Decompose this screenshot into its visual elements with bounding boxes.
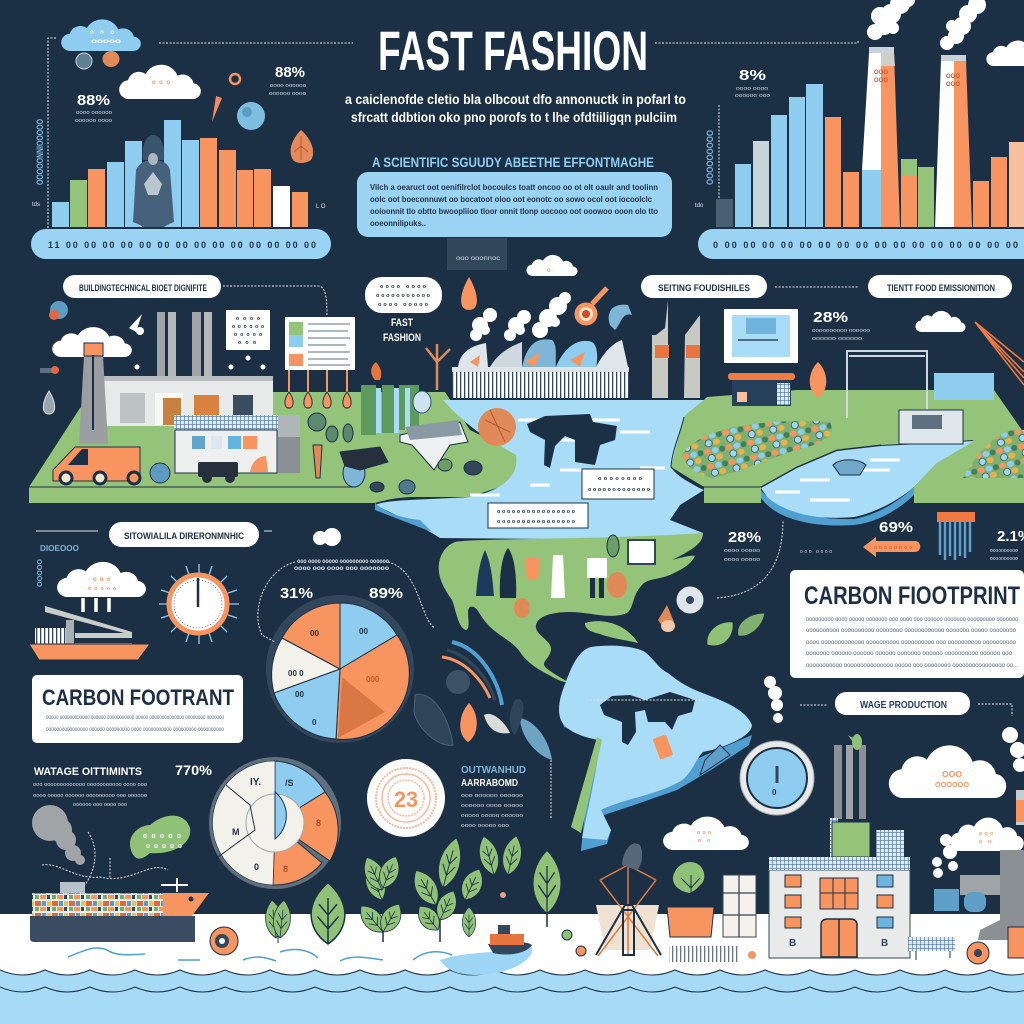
left bar chart xyxy=(32,38,326,228)
cloud right edge xyxy=(986,41,1024,66)
cargo ship xyxy=(30,878,209,942)
subtitle: a caiclenofde cletio bla olbcout dfo annonuctk in pofarl to xyxy=(345,91,686,107)
title: FAST FASHION xyxy=(378,19,648,82)
stat 28 percent: 28% xyxy=(813,309,848,326)
chimney one: OOO xyxy=(874,70,888,76)
cloud right low: ooo xyxy=(979,831,993,837)
right river xyxy=(761,441,974,526)
pie chart large: 00 0 xyxy=(288,669,304,678)
small blue labels: OOOOO xyxy=(37,558,44,587)
tree small 1 xyxy=(264,899,292,943)
gauge xyxy=(159,564,239,644)
figures xyxy=(476,550,494,596)
stat 28 center: oooo ooooo xyxy=(724,557,760,563)
stat 88 left: oooooo oooo xyxy=(75,118,112,124)
cloud low middle xyxy=(663,817,749,850)
south land water blob xyxy=(559,646,752,851)
subtitle xyxy=(345,91,686,125)
green speech blob: ooooo xyxy=(146,843,182,850)
cloud large right xyxy=(889,745,1006,798)
ship on water xyxy=(400,391,516,470)
small leaf pink dot xyxy=(500,892,506,898)
cloud right top xyxy=(915,311,966,332)
pie labels xyxy=(280,559,403,602)
title rule right xyxy=(655,40,858,43)
text block right of badge: oooo ooooo ooo xyxy=(461,823,509,829)
truck xyxy=(53,447,140,484)
water sign: ooooooooooooo xyxy=(588,487,651,493)
blue building xyxy=(934,373,994,400)
stat 2.1 xyxy=(990,528,1024,562)
study text panel xyxy=(357,172,672,237)
water sign lower xyxy=(488,503,588,528)
section: wage text left: ooo ooooooooooooo ooooooooooo oooo ooo xyxy=(33,782,147,788)
machine xyxy=(899,410,963,444)
cloud right low: oo xyxy=(979,839,991,845)
panel: carbon footrant: oooooooooooooooo oooooo ooooooooo oooo ooooooooooo ooooooooo oooooooooo xyxy=(46,727,225,733)
stat 2.1: oooooooooo xyxy=(990,548,1018,554)
text block right of badge: OUTWANHUD xyxy=(461,765,526,776)
potted tree xyxy=(667,862,714,937)
text block right of badge: ooooo ooooo oooooo xyxy=(461,813,523,819)
pie chart small: 8 xyxy=(316,818,321,828)
pie chart small: IY. xyxy=(250,777,261,788)
pill: left section: BUILDINGTECHNICAL BIOET DIGNIFITE xyxy=(79,283,207,293)
pie labels: 31% xyxy=(280,585,313,602)
ripples xyxy=(68,948,452,961)
main water body xyxy=(375,400,708,542)
pie chart large: 00 xyxy=(295,690,304,699)
stat 69 with arrow: 69% xyxy=(879,519,913,536)
office building: B xyxy=(881,938,888,949)
bubble label: oooo oooo xyxy=(380,284,427,290)
cloud by chimney xyxy=(52,327,132,357)
bubble label: oooo ooooo xyxy=(378,302,429,308)
panel: carbon footrant: ooooo oooooooooooo oooooo ooooooooooo ooooo oooooooooooooo oooooooo ooooooo xyxy=(46,715,224,721)
text block right of badge xyxy=(461,765,526,829)
drop on stalk xyxy=(371,362,381,380)
pie chart small: /S xyxy=(285,778,294,788)
badge xyxy=(367,759,445,837)
stat 69 with arrow: oooooooo xyxy=(874,545,912,551)
right chart axis pill: 0 00 00 00 00 00 00 00 00 00 00 00 00 00 00 00 00 xyxy=(713,240,1018,250)
sign board xyxy=(226,310,270,350)
text block right of badge: oooooo oooo ooooo xyxy=(461,803,523,809)
stat 28 center: 28% xyxy=(728,529,761,546)
leaves middle right xyxy=(658,605,765,646)
crane lines xyxy=(975,322,1024,385)
trees row xyxy=(264,834,561,944)
badge: 23 xyxy=(394,787,418,812)
cloud small center: o xyxy=(547,268,551,274)
water sign xyxy=(582,469,654,499)
hooded figure xyxy=(133,135,174,227)
blue cloud xyxy=(61,19,141,51)
pie chart small: 8 xyxy=(283,864,288,874)
pill connectors xyxy=(800,704,1012,716)
left bar chart: OOOOONNIOOOOO xyxy=(35,119,45,185)
pie chart large xyxy=(266,595,414,743)
tree branching 3 xyxy=(354,853,407,942)
dotted connector xyxy=(223,286,327,316)
orange drop xyxy=(461,277,477,310)
orange tag on map xyxy=(653,734,673,760)
small coins on land xyxy=(150,413,482,494)
central power plant xyxy=(452,339,629,398)
study text panel: Vilch a oearuct oot oenifilrclot bocoulcs toatt oncoo oo ot olt oaulr and toolinn xyxy=(370,183,658,192)
water sign lower: oooooooooooooooo xyxy=(497,509,576,515)
pill: left section xyxy=(63,275,221,298)
bubble label xyxy=(365,277,442,313)
stat 28 center xyxy=(724,529,761,563)
tree branching 4 xyxy=(407,835,488,942)
cloud low middle: oo xyxy=(698,838,710,844)
right chimneys xyxy=(652,300,700,398)
blue conveyor xyxy=(908,937,955,960)
tall chimney xyxy=(79,343,108,444)
stat 67 percent: oooooo ooo xyxy=(735,93,770,99)
dotted route lines xyxy=(42,832,168,885)
stat 69 with arrow: ooo oooo xyxy=(800,549,832,555)
pie chart small: M xyxy=(232,827,240,837)
chimney two: OOO xyxy=(946,82,960,88)
grey factory right xyxy=(934,790,1024,940)
cloud with bars: ooo xyxy=(93,577,110,583)
cloud large right: OOOOOO xyxy=(935,782,970,789)
data board xyxy=(285,317,355,370)
flower fields xyxy=(682,421,1024,478)
right edge smoke xyxy=(932,834,958,878)
chimney two xyxy=(935,55,972,227)
stat 67 percent xyxy=(735,67,770,99)
pill: middle right xyxy=(641,275,767,298)
panel: carbon footrant xyxy=(32,675,243,743)
world map upper xyxy=(527,414,617,468)
pie labels: 89% xyxy=(369,585,403,602)
pill: structural xyxy=(109,522,259,547)
sign board: ooooo xyxy=(234,332,262,338)
pill: wage production: WAGE PRODUCTION xyxy=(860,700,947,711)
stat 88 right: 88% xyxy=(275,64,305,81)
pie labels: ooo oooo ooooo ooooooooo oooooo xyxy=(297,559,389,565)
chimney one: OOO xyxy=(874,78,888,84)
info board right xyxy=(724,309,798,363)
chimney one xyxy=(862,47,900,227)
cloud with bars xyxy=(57,562,146,612)
pill: far right: TIENTT FOOD EMISSIONITION xyxy=(887,283,995,293)
left floating icons xyxy=(40,301,266,414)
small blue labels: DIOEOOO xyxy=(40,544,79,553)
left bar chart: tds xyxy=(32,202,40,208)
crate xyxy=(669,946,740,962)
chimney smoke xyxy=(867,0,986,50)
small grey note xyxy=(447,238,507,270)
sign board: oooo xyxy=(236,316,260,322)
icon cloud small top xyxy=(313,528,341,546)
section: wage text left: oooooo ooo oooo ooo xyxy=(73,802,127,808)
pie chart large: 0 xyxy=(312,718,317,727)
plant smoke xyxy=(470,292,571,341)
cloud low middle: ooo xyxy=(697,830,711,836)
pie chart large: 000 xyxy=(366,675,380,684)
fast fashion label xyxy=(383,317,421,344)
tree small 7 xyxy=(462,907,476,937)
cloud small center xyxy=(526,255,578,276)
gauge blue xyxy=(740,741,814,815)
blue cloud: ooo xyxy=(90,30,114,36)
study text panel: oolc oot boeconnuwt oo bocatoot oloo oot eonotc oo sowo ocol oot iocoolclc xyxy=(370,195,653,204)
reeds xyxy=(361,385,419,435)
stat 28 percent: oooooooooo oooooo xyxy=(812,328,870,334)
hanging drops xyxy=(285,370,351,408)
stat 88 left: 88% xyxy=(77,92,110,109)
right land block xyxy=(671,390,1024,503)
title rule left xyxy=(159,42,353,44)
pie chart small xyxy=(209,757,341,889)
stat 67 percent: 8% xyxy=(739,67,766,84)
connector xyxy=(775,286,859,288)
orange box right xyxy=(1008,927,1024,958)
stat 67 percent: oooo oooo xyxy=(736,86,768,92)
pill rules xyxy=(36,530,272,532)
stat 28 percent xyxy=(812,309,870,342)
orange leaf xyxy=(810,362,826,398)
small ground icons xyxy=(562,930,989,964)
disc icon xyxy=(676,586,704,614)
section: wage text left xyxy=(33,766,147,808)
white cloud xyxy=(119,65,201,99)
reel icon xyxy=(210,927,238,955)
dashed curve xyxy=(717,520,783,598)
green speech blob xyxy=(130,816,190,859)
front building xyxy=(174,415,300,473)
fast fashion label: FASHION xyxy=(383,332,421,344)
stat 88 left: oooo oooooo xyxy=(76,110,112,116)
pie chart small: 0 xyxy=(254,862,259,872)
sea waves xyxy=(0,970,1024,1024)
fast fashion label: FAST xyxy=(391,317,413,329)
world map lower xyxy=(600,692,695,745)
right bar chart xyxy=(695,84,1024,227)
blue ribbon corner xyxy=(700,745,730,775)
bottom white ground xyxy=(0,914,1024,984)
stat 88 right: oooo oooooo xyxy=(270,83,306,89)
stat 28 center: oooo ooooo xyxy=(724,548,760,554)
section: wage text left: oooo ooooo oooooo ooooooooo ooo oooooo xyxy=(33,793,147,799)
sign board: oooooo xyxy=(232,324,264,330)
left land block xyxy=(29,392,520,503)
study text panel: ooeonnilipuks.. xyxy=(370,219,426,228)
water tower stripes xyxy=(937,512,975,560)
pie chart large: 00 xyxy=(310,629,319,638)
text block right of badge: ooo oooooo oooooo xyxy=(461,793,523,799)
cloud with bars: ooooo xyxy=(88,586,116,592)
office building: B xyxy=(789,938,796,949)
pill: far right xyxy=(868,275,1012,298)
left chart axis pill xyxy=(31,229,331,259)
left factory xyxy=(103,312,273,426)
window frame xyxy=(723,875,756,937)
left bar chart: L O xyxy=(316,204,326,210)
rainbow and leaves xyxy=(414,642,552,760)
section: wage text left: WATAGE OITTIMINTS xyxy=(34,766,142,778)
small blue labels xyxy=(37,544,79,587)
dashed vertical xyxy=(550,760,552,818)
tree big xyxy=(311,883,345,944)
panel: carbon footprint: ooooooo oooooo oooooo oooooo ooooooo oooooo oooooooooo oooooo ooo xyxy=(806,650,1012,657)
white cloud: ooo xyxy=(152,80,170,86)
panel: carbon footprint xyxy=(790,570,1024,678)
cloud right low xyxy=(950,818,1024,851)
stat 88 right: oooooo oooo xyxy=(269,91,306,97)
pill: middle right: SEITING FOUDISHILES xyxy=(658,283,750,293)
left chart axis pill: 11 00 00 00 00 00 00 00 00 00 00 00 00 00 00 xyxy=(48,240,316,250)
water sign: oooooooo xyxy=(598,476,643,482)
lower land shape xyxy=(439,533,703,683)
stat 69 with arrow xyxy=(800,519,920,557)
pylon xyxy=(596,843,661,956)
bare tree xyxy=(426,344,450,390)
ship smoke xyxy=(32,805,85,865)
map dashed frame xyxy=(590,699,705,701)
people group on lower land xyxy=(439,533,703,683)
right bar chart: tdo xyxy=(695,203,704,209)
blue cloud: ooooo xyxy=(91,39,122,45)
white smoke plume xyxy=(764,676,1024,772)
target ring icon xyxy=(574,288,632,330)
boat on pond xyxy=(440,925,532,975)
cloud large right: OOO xyxy=(942,770,962,779)
text block right of badge: AARRABOMD xyxy=(461,778,518,789)
pie chart large: 00 xyxy=(359,627,368,636)
stat 2.1: oooooooooo xyxy=(990,556,1018,562)
tree far xyxy=(533,850,561,927)
chimney two: OOO xyxy=(946,74,960,80)
panel: carbon footrant: CARBON FOOTRANT xyxy=(42,685,234,710)
pie labels: oooo ooo oooo ooo ooooooo xyxy=(294,566,389,572)
stat 88 left xyxy=(75,92,112,124)
stat 88 right xyxy=(269,64,306,97)
subtitle: sfrcatt ddbtion oko pno porofs to t lhe ofdtiiligqn pulciim xyxy=(351,109,677,125)
icon: floating elements xyxy=(212,74,313,163)
bubble label: ooooooooooo xyxy=(376,293,431,299)
gate frame xyxy=(847,351,927,420)
tree top pair xyxy=(475,834,525,877)
pill: structural: SITOWIALILA DIRERONMNHIC xyxy=(124,531,244,541)
sign board: ooo xyxy=(238,340,256,346)
pie curved connectors xyxy=(258,562,435,642)
stat 28 percent: oooooo oooooo xyxy=(812,336,862,342)
stat 77 percent: 770% xyxy=(175,762,213,778)
right chart axis pill xyxy=(698,229,1024,259)
water sign lower: oooooooooooooooo xyxy=(497,519,576,525)
small grey note: ooo ooonnoc xyxy=(456,256,500,262)
section heading: A SCIENTIFIC SGUUDY ABEETHE EFFONTMAGHE xyxy=(372,154,654,170)
ship mini xyxy=(29,606,150,660)
green speech blob: ooooo xyxy=(143,833,181,840)
market stall xyxy=(728,373,795,406)
office building xyxy=(769,857,910,958)
right bar chart: OOOOOOOOO xyxy=(705,130,715,185)
icon: globe and nut xyxy=(76,51,120,69)
pill: wage production xyxy=(835,692,970,715)
central building chimneys xyxy=(830,734,904,858)
gauge blue: 0 xyxy=(772,788,777,797)
van xyxy=(198,456,268,483)
study text panel: ooioonnit tlo obtto bwoopliioo tloor onnit tlonp oocooo oot ooowoo ooon olo tto xyxy=(370,207,658,216)
